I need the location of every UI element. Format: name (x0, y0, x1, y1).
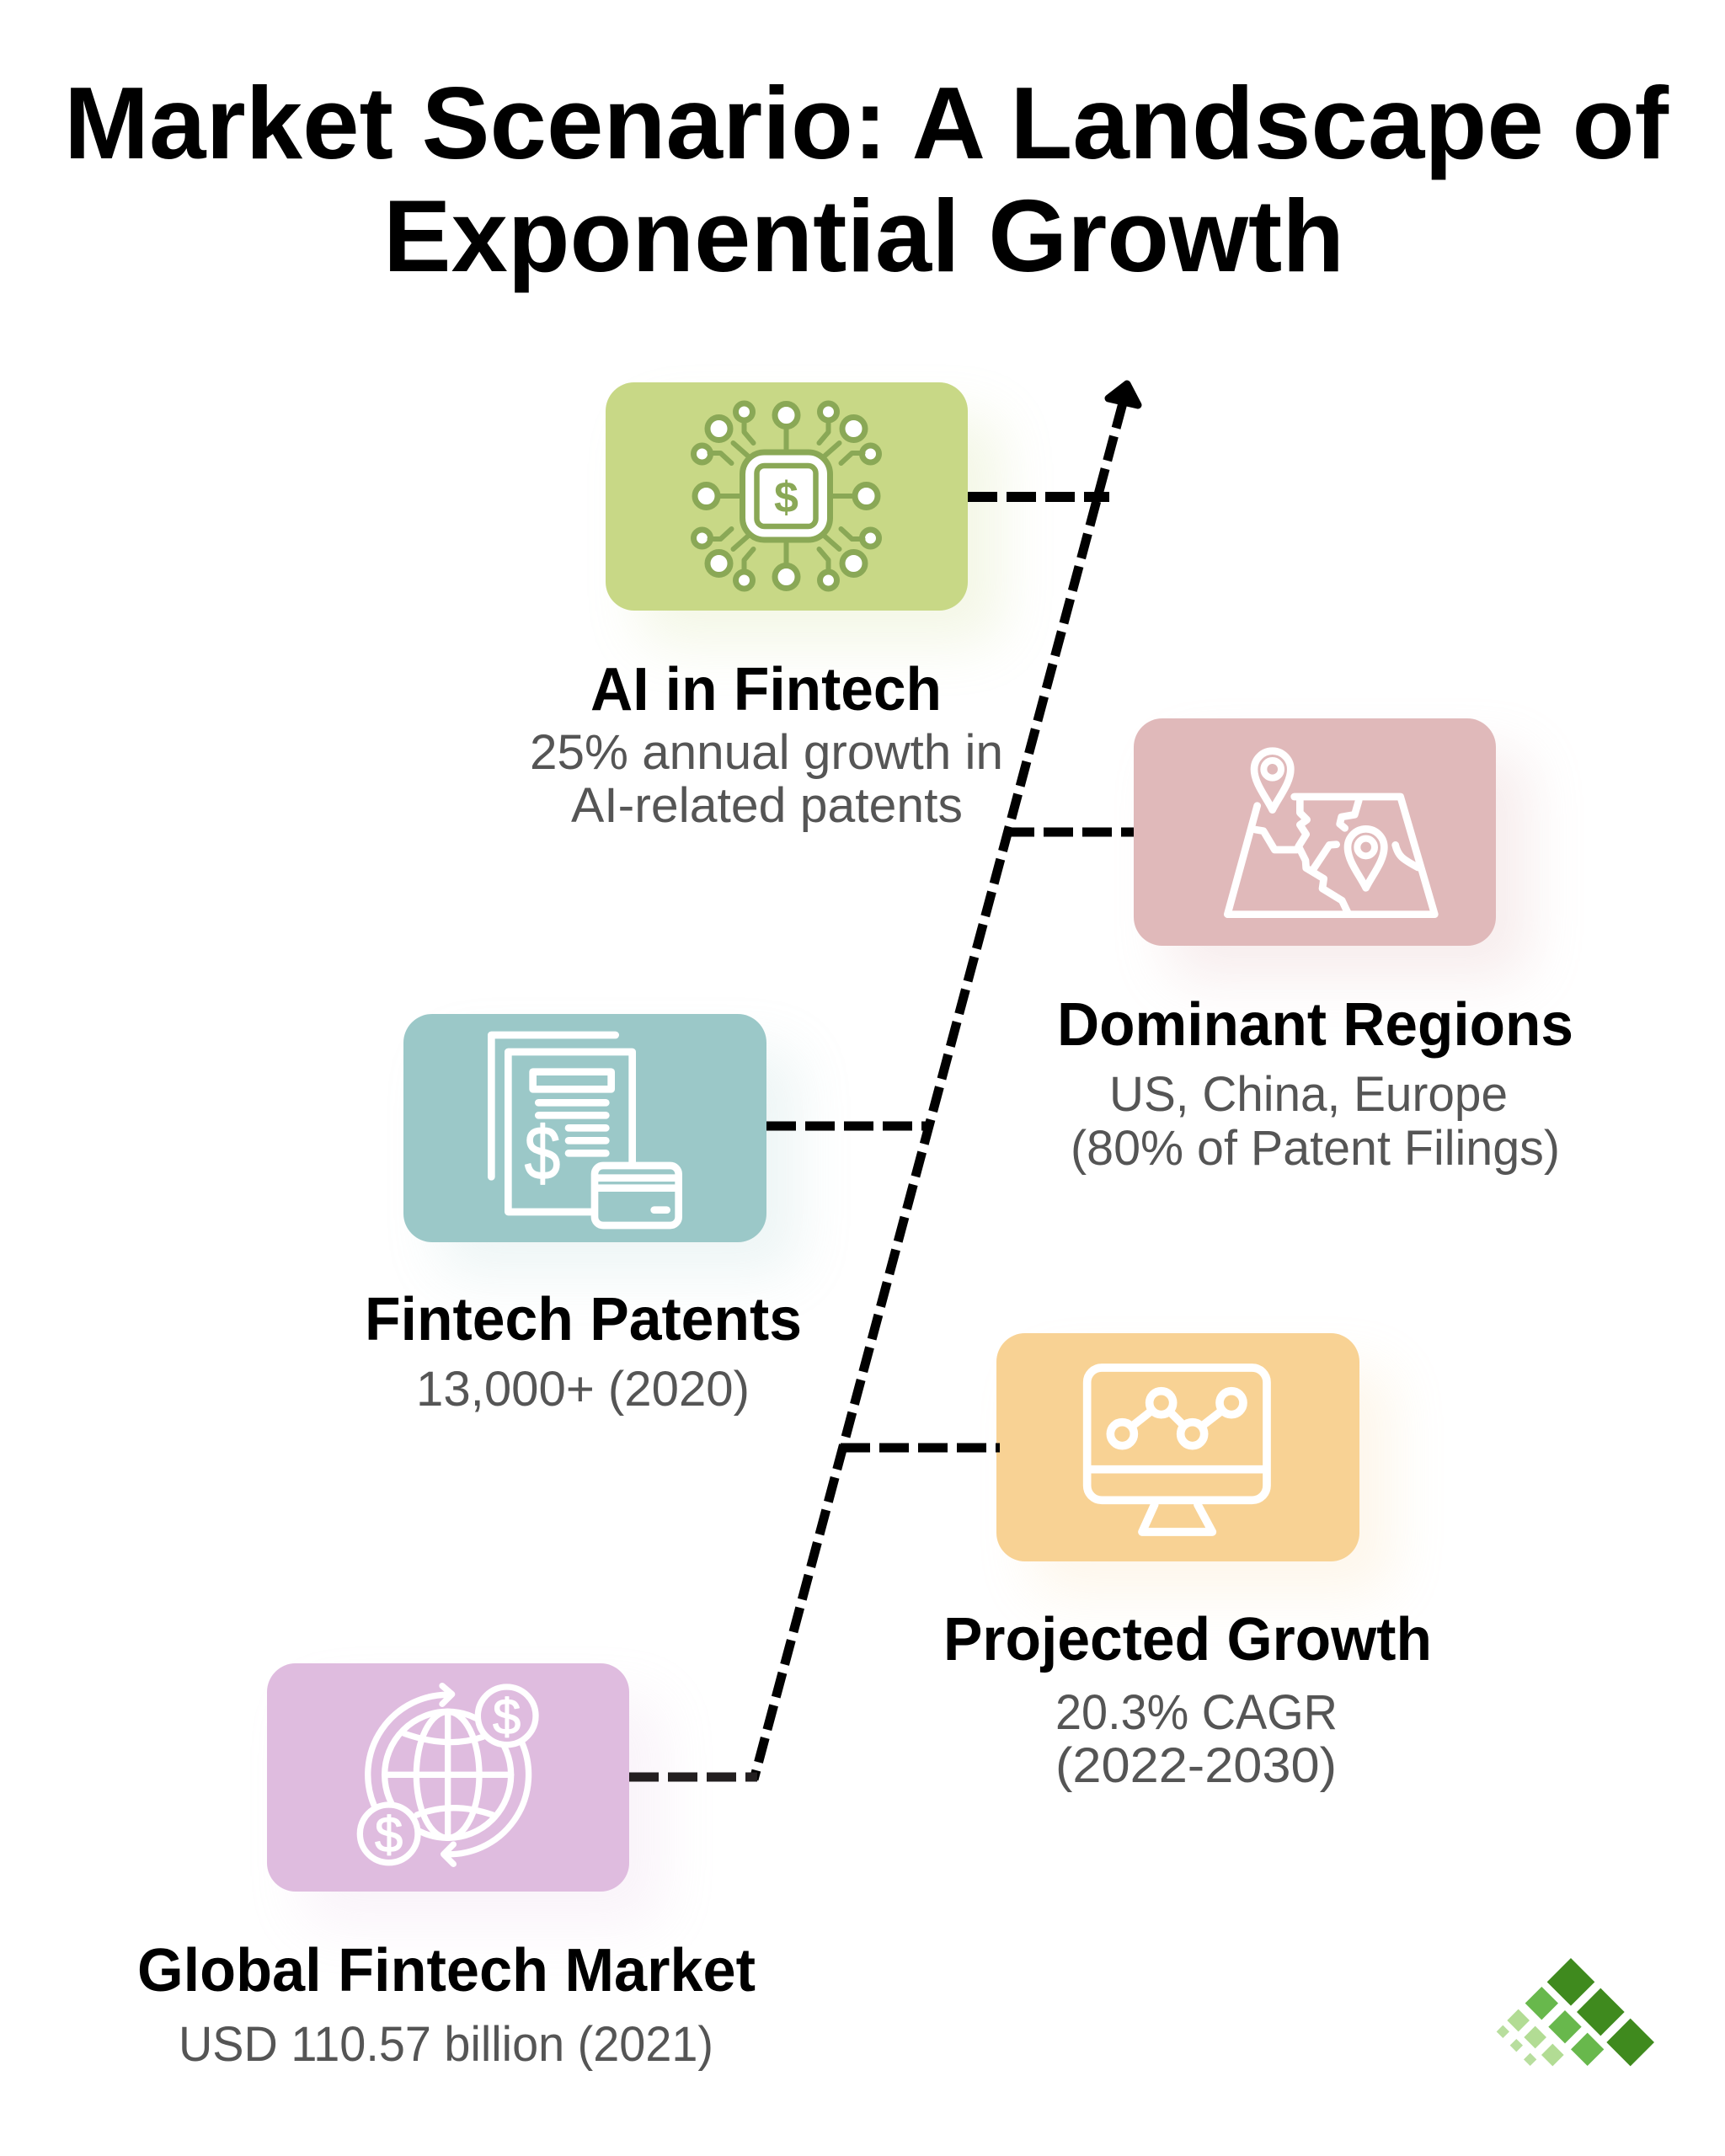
icon: globe with currency exchange: $ (493, 1689, 521, 1745)
title (64, 66, 1669, 293)
heading: AI in Fintech: AI in Fintech (590, 656, 942, 723)
heading: Dominant Regions: Dominant Regions (1057, 991, 1573, 1059)
icon: AI chip with dollar sign: $ (774, 473, 798, 522)
heading: Global Fintech Market: Global Fintech Market (137, 1937, 756, 2004)
panel: Global Fintech Market (137, 1663, 756, 2072)
text: Projected Growth detail (1055, 1685, 1338, 1793)
text: AI in Fintech detail: AI-related patents (571, 778, 963, 833)
panel: Projected Growth (943, 1333, 1432, 1793)
title: Exponential Growth (383, 179, 1344, 293)
card: AI in Fintech (606, 382, 968, 611)
icon: patent document with credit card: $ (525, 1112, 560, 1196)
text: AI in Fintech detail (530, 725, 1003, 833)
panel: Fintech Patents (365, 1014, 802, 1417)
arrow: dashed growth trend line (754, 384, 1138, 1780)
logo: green diamonds (1497, 1958, 1654, 2066)
icon: monitor with line chart (1087, 1368, 1267, 1532)
card: Fintech Patents (403, 1014, 766, 1242)
heading: Fintech Patents: Fintech Patents (365, 1286, 802, 1353)
text: Fintech Patents detail: 13,000+ (2020) (416, 1362, 750, 1417)
panel: AI in Fintech (530, 382, 1003, 833)
text: AI in Fintech detail: 25% annual growth in (530, 725, 1003, 780)
icon: globe with currency exchange (360, 1686, 536, 1864)
card: Dominant Regions (1134, 718, 1496, 946)
card: Global Fintech Market (267, 1663, 629, 1892)
text: Dominant Regions detail: (80% of Patent Filings) (1071, 1121, 1560, 1176)
icon: globe with currency exchange: $ (375, 1806, 403, 1863)
heading: Projected Growth: Projected Growth (943, 1606, 1432, 1673)
text: Projected Growth detail: 20.3% CAGR (1055, 1685, 1338, 1740)
connector: AI in Fintech to trend line (968, 492, 1109, 502)
icon: map with location pins (1227, 751, 1434, 915)
title: Market Scenario: A Landscape of (64, 66, 1669, 180)
text: Dominant Regions detail (1071, 1067, 1560, 1176)
connector: Dominant Regions to trend line (1005, 827, 1134, 837)
text: Global Fintech Market detail: USD 110.57 billion (2021) (179, 2017, 713, 2072)
icon: patent document with credit card (491, 1035, 679, 1225)
text: Projected Growth detail: (2022-2030) (1055, 1738, 1337, 1793)
connector: Fintech Patents to trend line (766, 1122, 930, 1130)
connector: Projected Growth to trend line (841, 1444, 1000, 1452)
panel: Dominant Regions (1057, 718, 1573, 1176)
icon: AI chip with dollar sign (694, 403, 879, 589)
connector: Global Fintech Market to trend line (629, 1772, 757, 1782)
text: Dominant Regions detail: US, China, Europe (1109, 1067, 1508, 1122)
card: Projected Growth (996, 1333, 1359, 1561)
